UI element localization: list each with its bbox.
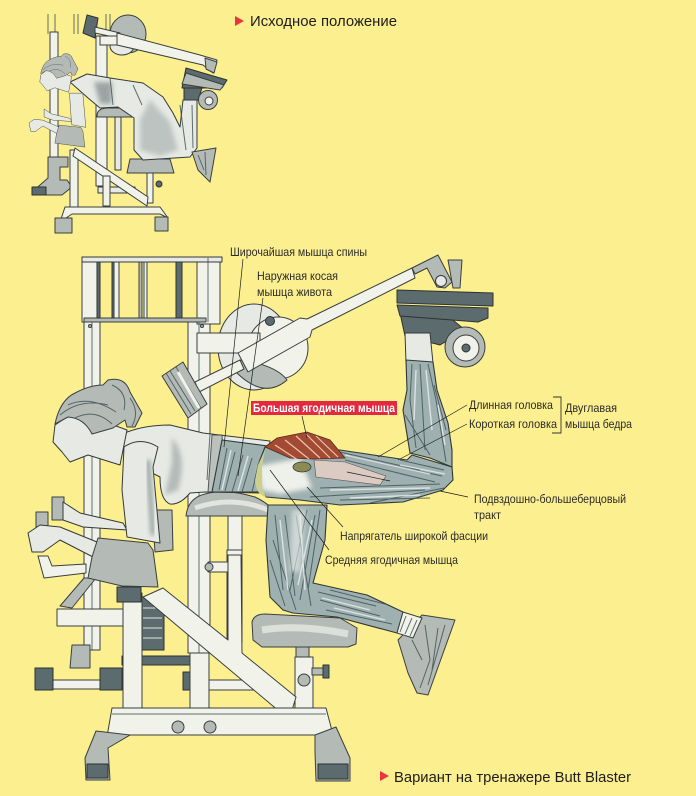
sock on raised leg [405,333,433,363]
label: external oblique: мышца живота [257,285,332,299]
small shoe [192,148,216,182]
icon: red marker [235,16,244,26]
label: iliotibial tract: тракт [474,508,501,522]
supporting vertical thigh and shin [266,505,403,633]
weight cylinder and rod [162,333,260,418]
illustration: main figure on machine [28,255,493,781]
lower knee pad [252,614,357,717]
small machine rear rack [32,14,135,195]
hip, gluteus and hamstring leg [255,432,453,505]
cam disks [218,304,308,390]
label: tensor fasciae latae [307,487,488,543]
heading: start position: Исходное положение [250,13,397,30]
label: gluteus medius [270,470,458,567]
label: iliotibial tract: Подвздошно-большеберцовый [474,492,626,506]
arm pad front [88,538,158,587]
small lever arm with disk and weight [83,15,217,73]
upper seat [186,492,277,642]
label: gluteus maximus highlighted: Большая ягодичная мышца [253,403,396,415]
label: tensor fasciae latae: Напрягатель широкой фасции [340,529,488,543]
head [53,379,142,465]
label: external oblique [238,269,338,476]
rear arm support and handles [36,497,173,578]
illustration: start position figure on machine [29,14,227,233]
small seat pads [97,108,174,203]
gluteus maximus highlighted [265,432,345,460]
label: gluteus maximus highlighted [251,401,397,438]
frame: column, diagonal and base [85,555,350,781]
icon: red marker [380,771,389,781]
label: biceps femoris heads with bracket [378,397,632,460]
far forearm and hand [63,502,127,530]
foot pad and roller [397,290,493,367]
lever arm [238,255,462,372]
rear machine parts [35,578,265,690]
near upper arm [122,442,160,543]
small machine frame [55,148,168,233]
rear rack frame [82,257,222,653]
label: latissimus dorsi: Широчайшая мышца спины [230,245,367,259]
heading: Butt Blaster variant: Вариант на тренажере Butt Blaster [394,769,631,786]
small foot pad and roller [182,68,227,110]
label: biceps femoris heads with bracket: Короткая головка [469,417,557,431]
near forearm and hand [28,525,97,557]
label: biceps femoris heads with bracket: Длинная головка [469,398,553,412]
label: biceps femoris heads with bracket: мышца бедра [565,417,632,431]
raised lower leg [403,360,452,467]
torso [118,425,270,504]
small figure legs and trunk [70,74,197,160]
label: biceps femoris heads with bracket: Двуглавая [565,401,617,415]
label: external oblique: Наружная косая [257,269,338,283]
label: iliotibial tract [347,472,626,522]
sock and shoe [397,612,455,695]
label: gluteus medius: Средняя ягодичная мышца [325,553,458,567]
small upper body, arms and head [29,54,86,147]
label: latissimus dorsi [224,245,367,447]
